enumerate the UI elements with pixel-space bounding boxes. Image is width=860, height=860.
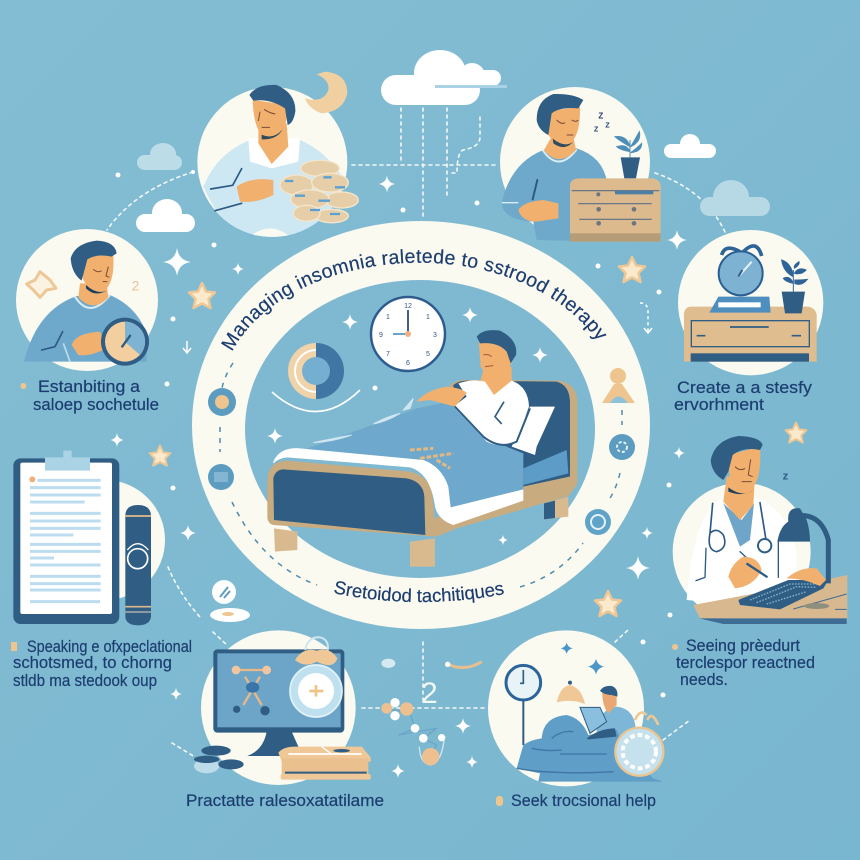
illustration: person in bed [267, 330, 577, 567]
flower [27, 272, 56, 297]
ring: badge orange burst [208, 388, 236, 416]
books [278, 747, 371, 780]
step: left sleep schedule [16, 229, 158, 389]
wall clock [506, 665, 541, 700]
torso [203, 140, 340, 240]
step 6 label [496, 792, 656, 810]
neck [258, 123, 288, 164]
label line: Create a a stesfy [677, 379, 813, 397]
step 4 label [11, 638, 192, 690]
text lines [30, 480, 101, 602]
desk lines [793, 594, 847, 609]
label line 2: saloep sochetule [33, 396, 159, 414]
paper [20, 463, 112, 614]
zzz: Z [598, 111, 603, 120]
keyboard hand [787, 568, 826, 586]
head [253, 100, 288, 135]
step 5 label: Practatte ralesoxatatilame [186, 792, 384, 810]
glass lens [290, 665, 342, 717]
title curved: Managing insomnia raletede to sstrood therapy [221, 249, 607, 351]
illustration: clock [371, 297, 445, 371]
circle [488, 630, 644, 786]
bells [722, 246, 762, 256]
step: top right sleeping by dresser [500, 87, 661, 242]
label line 3: needs. [680, 671, 728, 689]
moon [305, 72, 347, 113]
big number 2: 2 [421, 677, 438, 710]
blanket highlights [313, 398, 413, 443]
hand [72, 332, 107, 355]
label text: Seek trocsional help [511, 792, 656, 810]
label line: Speaking e ofxpeclational [27, 638, 192, 656]
head [545, 107, 580, 144]
label line 3: stldb ma stedook oup [13, 672, 157, 690]
number: 2 [132, 278, 140, 294]
neck ring [543, 149, 577, 162]
label line 2: terclespor reactned [676, 654, 815, 672]
ring: person icon [602, 368, 635, 403]
coat [687, 497, 797, 603]
bed rail [430, 475, 577, 537]
shirt [453, 380, 529, 445]
bullet [672, 644, 678, 650]
face [557, 120, 578, 135]
illustration: clock: 5 [426, 351, 430, 358]
desk [693, 575, 847, 618]
illustration: clock: 9 [379, 332, 383, 339]
footboard frame [267, 461, 437, 537]
tray [709, 297, 771, 313]
sofa [517, 715, 663, 782]
drawer [691, 321, 809, 347]
desk edge [699, 618, 847, 624]
beige stars [150, 257, 806, 616]
z: z [783, 470, 789, 482]
hand [738, 262, 752, 277]
neck ring [75, 295, 110, 308]
step: seek help [488, 630, 663, 786]
step: clipboard [13, 451, 165, 625]
hair [249, 85, 295, 125]
clip [45, 451, 90, 471]
stars [561, 643, 604, 675]
lamp [557, 685, 585, 704]
cylinder rings [128, 549, 148, 569]
cloud: white right [664, 134, 716, 158]
pillow [512, 407, 555, 455]
face [735, 459, 753, 482]
hands [417, 387, 467, 407]
blanket pattern [410, 448, 453, 468]
sweater [24, 295, 147, 362]
handles [697, 327, 801, 336]
pill highlights [285, 177, 345, 214]
clock [719, 251, 763, 295]
coat lines [696, 542, 778, 581]
ring: badge screen [208, 464, 234, 490]
hand [237, 179, 273, 202]
pot [621, 157, 640, 178]
circle [16, 229, 158, 371]
ring: outer cream ellipse [192, 221, 650, 629]
icon: down arrows [183, 303, 652, 353]
cloud: top centre [381, 50, 501, 105]
arm outline [453, 405, 530, 445]
hair [711, 436, 763, 480]
blanket [305, 400, 523, 508]
hair [477, 330, 516, 363]
face [93, 267, 109, 282]
small pill and smile [381, 659, 481, 668]
blanket [587, 728, 617, 739]
face [258, 109, 275, 127]
sparkles [110, 176, 687, 778]
cylinder [125, 505, 151, 625]
face [483, 354, 493, 367]
cylinder bands [125, 516, 151, 607]
illustration: day night cycle [272, 343, 360, 412]
clock stand [520, 700, 526, 745]
pot [782, 292, 805, 313]
connector dashed lines [107, 108, 725, 757]
plant [782, 260, 807, 292]
keyboard [738, 580, 828, 609]
beard [728, 487, 753, 494]
drawers [572, 191, 659, 219]
collar [248, 138, 300, 168]
central ring [192, 221, 650, 629]
monitor [213, 649, 344, 733]
ring: inner blue ellipse [245, 280, 595, 578]
subtitle curved: Sretoidod tachitiques [334, 581, 504, 603]
molecule chain [381, 698, 445, 765]
cloud: white left [136, 199, 195, 232]
leg front left [274, 528, 297, 552]
lamp [792, 515, 828, 583]
zzz small: Z [594, 127, 599, 134]
dots [116, 170, 672, 698]
dresser [684, 307, 817, 362]
monitor stand [247, 732, 302, 756]
label line: Estanbiting a [38, 378, 141, 396]
laptop [580, 707, 607, 733]
head [80, 255, 114, 292]
hand [518, 200, 558, 222]
illustration: clock: 1 [386, 314, 390, 321]
step 2 label [674, 379, 813, 414]
step 3 label [672, 637, 815, 689]
bullet [11, 642, 17, 651]
arm strap [533, 180, 537, 199]
circle [678, 230, 823, 375]
illustration: clock: 1 [426, 314, 430, 321]
circle [45, 480, 165, 600]
cloud: pale upper left [137, 143, 182, 170]
stethoscope [709, 503, 766, 552]
sweater [502, 148, 607, 242]
label line 2: schotsmed, to chorng [13, 654, 172, 672]
head [728, 447, 760, 489]
ring: badge recycle [609, 434, 635, 460]
neck [544, 137, 576, 159]
alarm clock [101, 318, 149, 366]
step: monitor relaxation [194, 630, 371, 785]
bullet [496, 796, 503, 806]
illustration: clock: 7 [386, 351, 390, 358]
person [597, 707, 637, 737]
illustration: clock: 12 [404, 303, 412, 310]
hair [537, 94, 583, 135]
badge [20, 383, 26, 389]
step: top left medication [197, 72, 358, 240]
step: top right alarm clock dresser [678, 230, 823, 375]
step: doctor at desk [673, 436, 847, 624]
circle [197, 87, 347, 237]
circle [201, 630, 356, 785]
lens plus [309, 685, 323, 697]
headboard panel [453, 381, 570, 487]
molecule nodes [381, 703, 392, 714]
bullet [29, 476, 35, 482]
arm line [42, 332, 63, 350]
label line 2: ervorhment [674, 396, 764, 414]
board [13, 458, 119, 624]
writing hand [728, 557, 762, 588]
beard [86, 285, 107, 294]
beard shadow [262, 129, 283, 139]
zzz third: Z [605, 122, 610, 129]
cloud: pale right [700, 180, 770, 216]
knobs [596, 192, 636, 226]
dresser [570, 178, 661, 242]
base [691, 353, 809, 362]
scrub [723, 503, 754, 547]
icon: pill and plate near ring [210, 580, 250, 622]
lens clasp [305, 637, 328, 652]
drawer label [615, 191, 653, 194]
pile of pills [280, 160, 358, 223]
neck [480, 367, 512, 397]
pen [747, 564, 767, 577]
plant [615, 132, 642, 157]
clouds [136, 50, 770, 232]
hair [71, 241, 117, 281]
leg front right [410, 538, 435, 567]
discs [194, 746, 244, 773]
circle [500, 87, 650, 237]
ring: dashes [220, 363, 622, 587]
head [479, 338, 515, 376]
molecule on screen [232, 666, 271, 715]
neck [78, 283, 108, 305]
blanket trim [273, 448, 523, 525]
ring: badge spiral [585, 509, 611, 535]
sofa lines [517, 731, 613, 773]
cuff [211, 169, 242, 211]
mattress side [523, 450, 568, 485]
headboard [450, 380, 577, 497]
illustration: clock: 3 [433, 332, 437, 339]
cloud: top centre streak [435, 85, 507, 88]
dresser base [570, 233, 661, 242]
footboard panel [273, 469, 425, 535]
label line: Seeing prèedurt [686, 637, 800, 655]
alarm clock [615, 713, 663, 776]
illustration: clock: 6 [406, 360, 410, 367]
screen [217, 653, 341, 727]
step 1 label [33, 378, 159, 414]
leg back right [544, 497, 568, 519]
beard [553, 139, 573, 147]
circle [673, 483, 811, 621]
neck [723, 477, 755, 520]
